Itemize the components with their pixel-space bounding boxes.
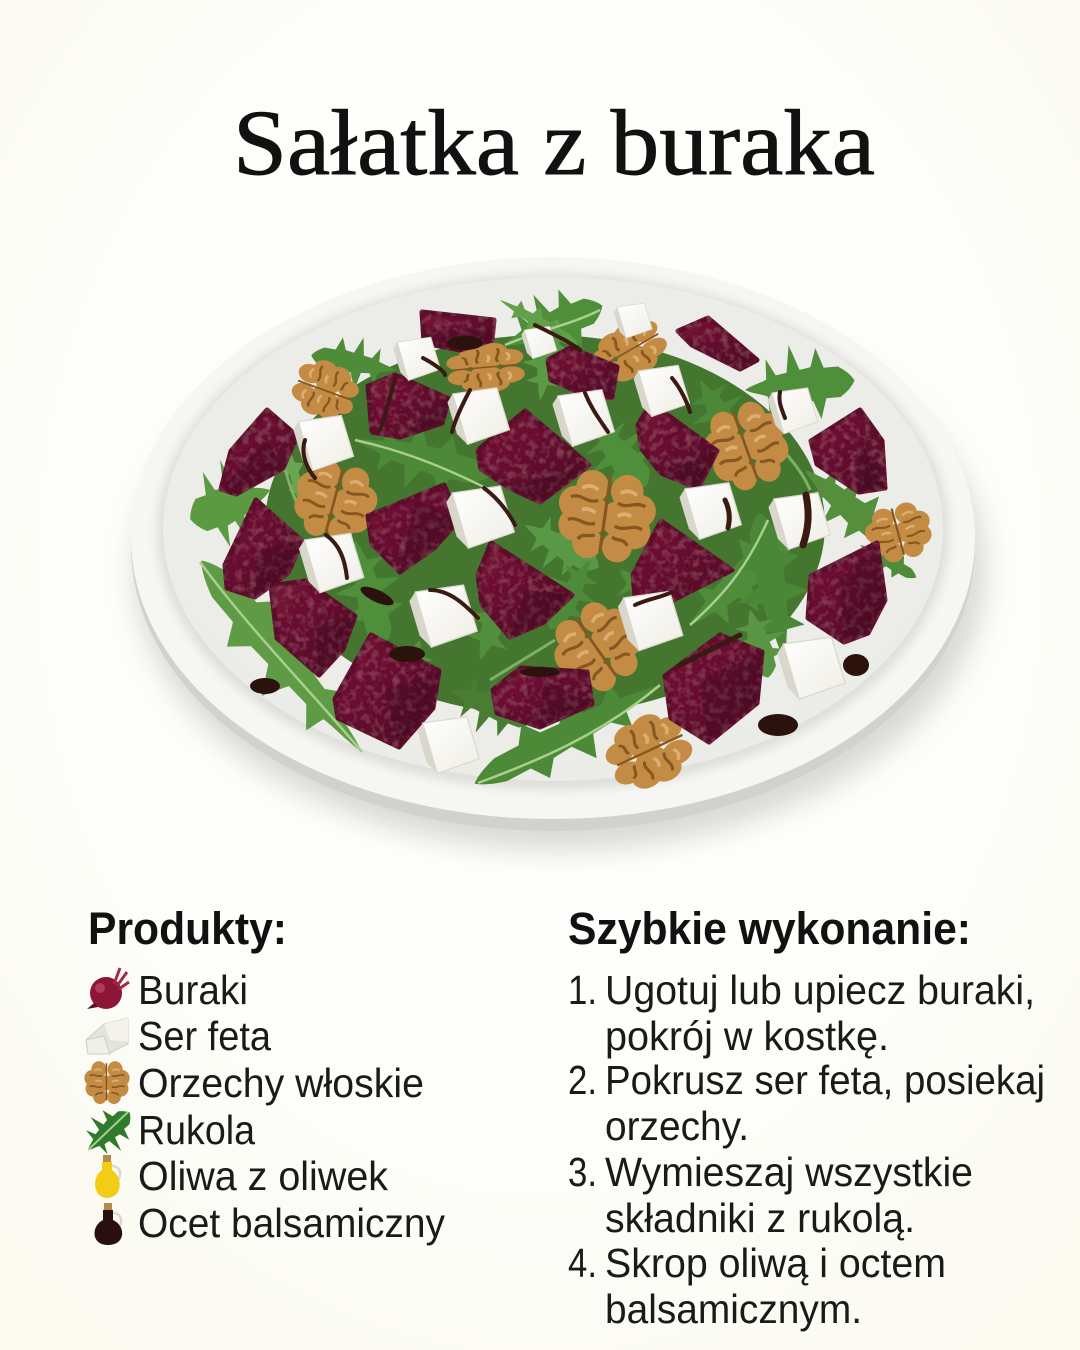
text: olive oil: Oliwa z oliwek (138, 1153, 388, 1199)
feta cubes (293, 303, 845, 773)
beet cubes (221, 312, 885, 747)
step 3: 3. (568, 1149, 597, 1195)
plate (131, 257, 975, 831)
step 1: pokrój w kostkę. (605, 1013, 889, 1059)
text: beets: Buraki (138, 967, 248, 1013)
step 2 (568, 1057, 1045, 1149)
icon: beet (87, 968, 129, 1009)
walnuts (286, 310, 938, 801)
icon: balsamic bottle (95, 1203, 122, 1245)
step 4 (568, 1240, 946, 1332)
step 2: orzechy. (605, 1103, 749, 1149)
heading: steps: Szybkie wykonanie: (568, 903, 971, 954)
panel: products (73, 903, 445, 1246)
icon: olive oil (95, 1155, 120, 1198)
balsamic drops (250, 336, 869, 736)
text: feta: Ser feta (138, 1013, 271, 1059)
text: arugula: Rukola (138, 1107, 255, 1153)
step 3: składniki z rukolą. (605, 1195, 915, 1241)
icon: feta (86, 1018, 128, 1054)
text: walnuts: Orzechy włoskie (138, 1060, 424, 1106)
step 3 (568, 1149, 973, 1241)
illustration: plate of beet salad (131, 257, 985, 850)
step 1 (568, 967, 1035, 1059)
panel: steps (568, 903, 1045, 1332)
step 4: 4. (568, 1240, 597, 1286)
heading: products: Produkty: (88, 903, 287, 954)
salad greens (170, 272, 923, 814)
text: balsamic vinegar: Ocet balsamiczny (138, 1200, 445, 1246)
step 3: Wymieszaj wszystkie (605, 1149, 973, 1195)
beet shaded sides (221, 330, 885, 747)
icon: arugula (73, 1096, 145, 1167)
title: Sałatka z buraka (233, 92, 875, 195)
balsamic drizzle (303, 325, 808, 665)
step 1: 1. (568, 967, 597, 1013)
step 2: 2. (568, 1057, 597, 1103)
step 2: Pokrusz ser feta, posiekaj (605, 1057, 1045, 1103)
step 1: Ugotuj lub upiecz buraki, (605, 967, 1035, 1013)
step 4: Skrop oliwą i octem (605, 1240, 946, 1286)
step 4: balsamicznym. (605, 1286, 862, 1332)
icon: walnut (84, 1061, 130, 1104)
